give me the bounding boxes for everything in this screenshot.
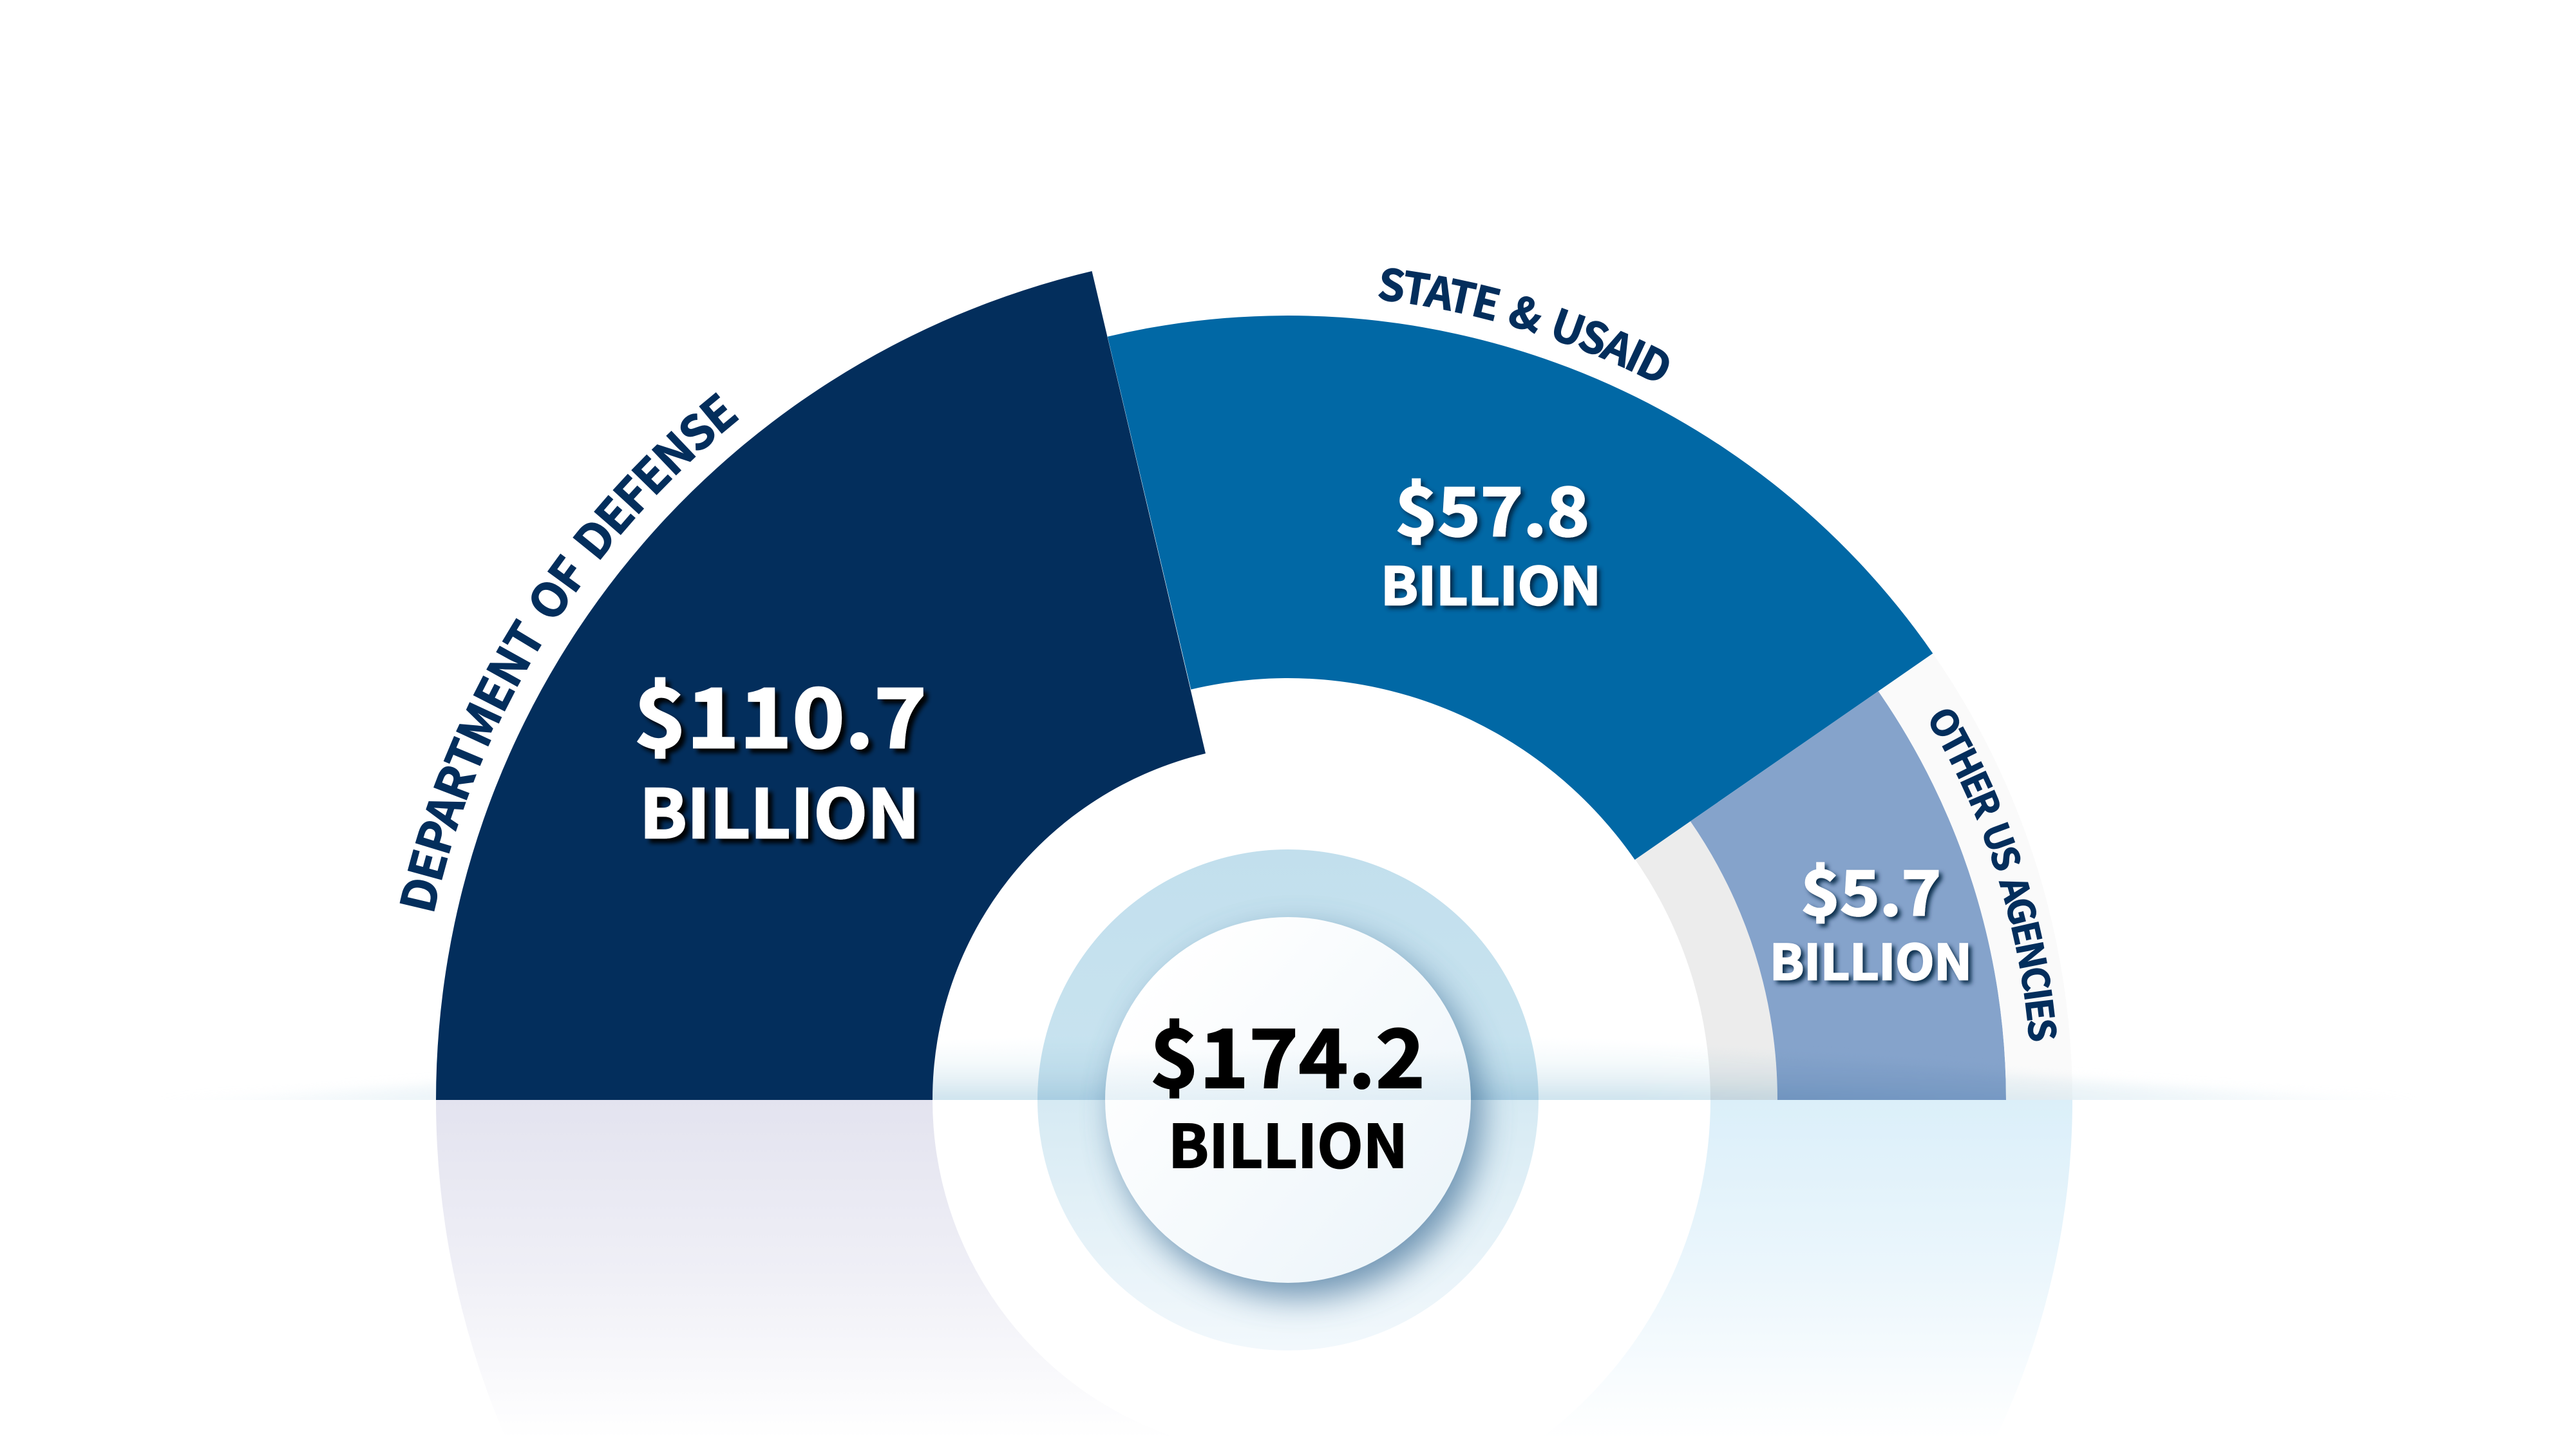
horizon glow (298, 1057, 2278, 1100)
value: department of defense: BILLION (639, 760, 920, 857)
segment: other US agencies (1635, 654, 2072, 1100)
outer ring of center total (1037, 849, 1539, 1350)
center disc shadow (1115, 931, 1481, 1297)
segment: state and USAID (1108, 316, 1933, 860)
center disc (1105, 917, 1471, 1283)
value: total (1150, 994, 1425, 1185)
value: department of defense (634, 652, 927, 857)
value: state and USAID: BILLION (1381, 545, 1601, 620)
value: total: $174.2 (1150, 994, 1425, 1112)
segment: department of defense (436, 271, 1206, 1100)
value: other agencies: BILLION (1770, 923, 1972, 994)
reflection: department of defense (436, 1100, 1172, 1436)
value: state and USAID (1381, 458, 1601, 620)
value: other agencies (1770, 844, 1972, 994)
semicircle budget chart (298, 268, 2278, 1370)
reflection: other agencies (1544, 1100, 2072, 1436)
label: other US agencies: OTHER US AGENCIES (1931, 710, 2057, 1041)
value: other agencies: $5.7 (1801, 844, 1941, 933)
value: total: BILLION (1168, 1099, 1408, 1185)
value: state and USAID: $57.8 (1395, 458, 1589, 555)
value: department of defense: $110.7 (634, 652, 927, 772)
label: department of defense: DEPARTMENT OF DEFENSE (399, 392, 739, 912)
label: state and USAID: STATE & USAID (1378, 268, 1669, 381)
